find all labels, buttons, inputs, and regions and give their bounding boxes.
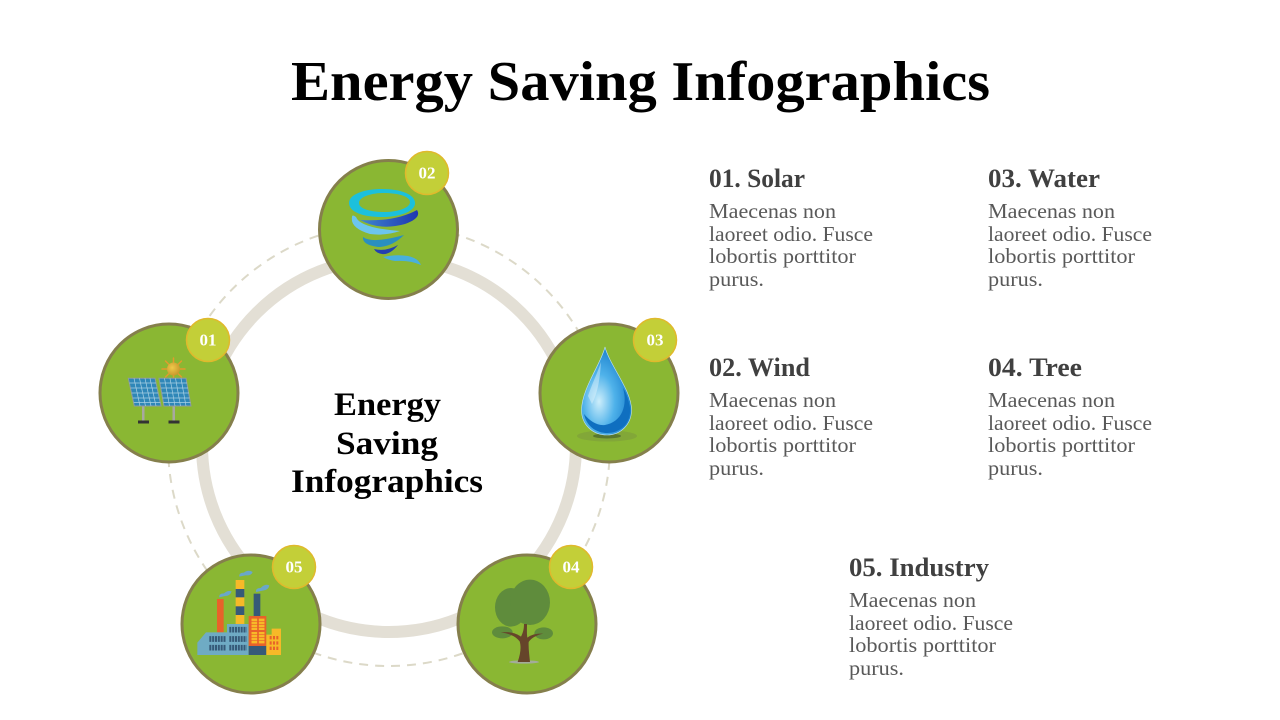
- text block 02: purus.: [709, 456, 764, 480]
- badge 01: 01: [200, 330, 216, 350]
- text block 01: purus.: [709, 267, 764, 291]
- text block 04: Maecenas non: [988, 388, 1116, 412]
- text block 03: laoreet odio. Fusce: [988, 222, 1152, 246]
- icon: tree: [492, 580, 553, 664]
- text block 04: purus.: [988, 456, 1043, 480]
- text block 05: 05. Industry: [849, 553, 989, 582]
- node 02: wind: [320, 152, 458, 298]
- text block 02: laoreet odio. Fusce: [709, 411, 873, 435]
- badge 04: [550, 546, 592, 588]
- text block 03: 03. Water: [988, 164, 1100, 193]
- badge 05: 05: [286, 558, 302, 576]
- text block 04: [988, 353, 1152, 480]
- text block 03: Maecenas non: [988, 199, 1116, 223]
- text block 03: [988, 164, 1152, 291]
- text block 03: lobortis porttitor: [988, 244, 1135, 268]
- text block 01: [709, 164, 873, 291]
- badge 02: [406, 152, 448, 194]
- text block 05: Maecenas non: [849, 588, 977, 612]
- badge 03: 03: [646, 330, 664, 350]
- node 05: industry: [182, 546, 320, 693]
- badge 05: [272, 546, 316, 588]
- text block 02: [709, 353, 873, 480]
- badge 03: [634, 318, 676, 362]
- text block 05: purus.: [849, 656, 904, 680]
- badge 04: 04: [562, 558, 580, 576]
- text block 03: purus.: [988, 267, 1043, 291]
- icon: solar panels and sun: [128, 358, 191, 424]
- icon: factory: [197, 571, 281, 655]
- text block 02: lobortis porttitor: [709, 433, 856, 457]
- center heading: [291, 387, 483, 500]
- text block 04: 04. Tree: [988, 353, 1082, 382]
- node 04: tree: [458, 546, 596, 693]
- text block 05: laoreet odio. Fusce: [849, 611, 1013, 635]
- center heading: Energy: [334, 387, 442, 423]
- node 03: water: [540, 318, 678, 462]
- center heading: Infographics: [291, 464, 483, 500]
- badge 01: [186, 318, 230, 362]
- center heading: Saving: [336, 426, 439, 462]
- text block 01: laoreet odio. Fusce: [709, 222, 873, 246]
- badge 02: 02: [418, 164, 436, 182]
- text block 02: Maecenas non: [709, 388, 837, 412]
- text block 01: 01. Solar: [709, 164, 805, 193]
- text block 04: laoreet odio. Fusce: [988, 411, 1152, 435]
- text block 04: lobortis porttitor: [988, 433, 1135, 457]
- text block 05: [849, 553, 1013, 680]
- text block 01: lobortis porttitor: [709, 244, 856, 268]
- text block 05: lobortis porttitor: [849, 633, 996, 657]
- text block 01: Maecenas non: [709, 199, 837, 223]
- solid inner ring: [202, 258, 576, 632]
- text block 02: 02. Wind: [709, 353, 811, 382]
- node 01: solar: [100, 318, 238, 462]
- title: Energy Saving Infographics: [291, 51, 990, 113]
- icon: water drop: [577, 347, 637, 442]
- dashed outer ring: [168, 224, 610, 666]
- icon: tornado: [349, 189, 421, 265]
